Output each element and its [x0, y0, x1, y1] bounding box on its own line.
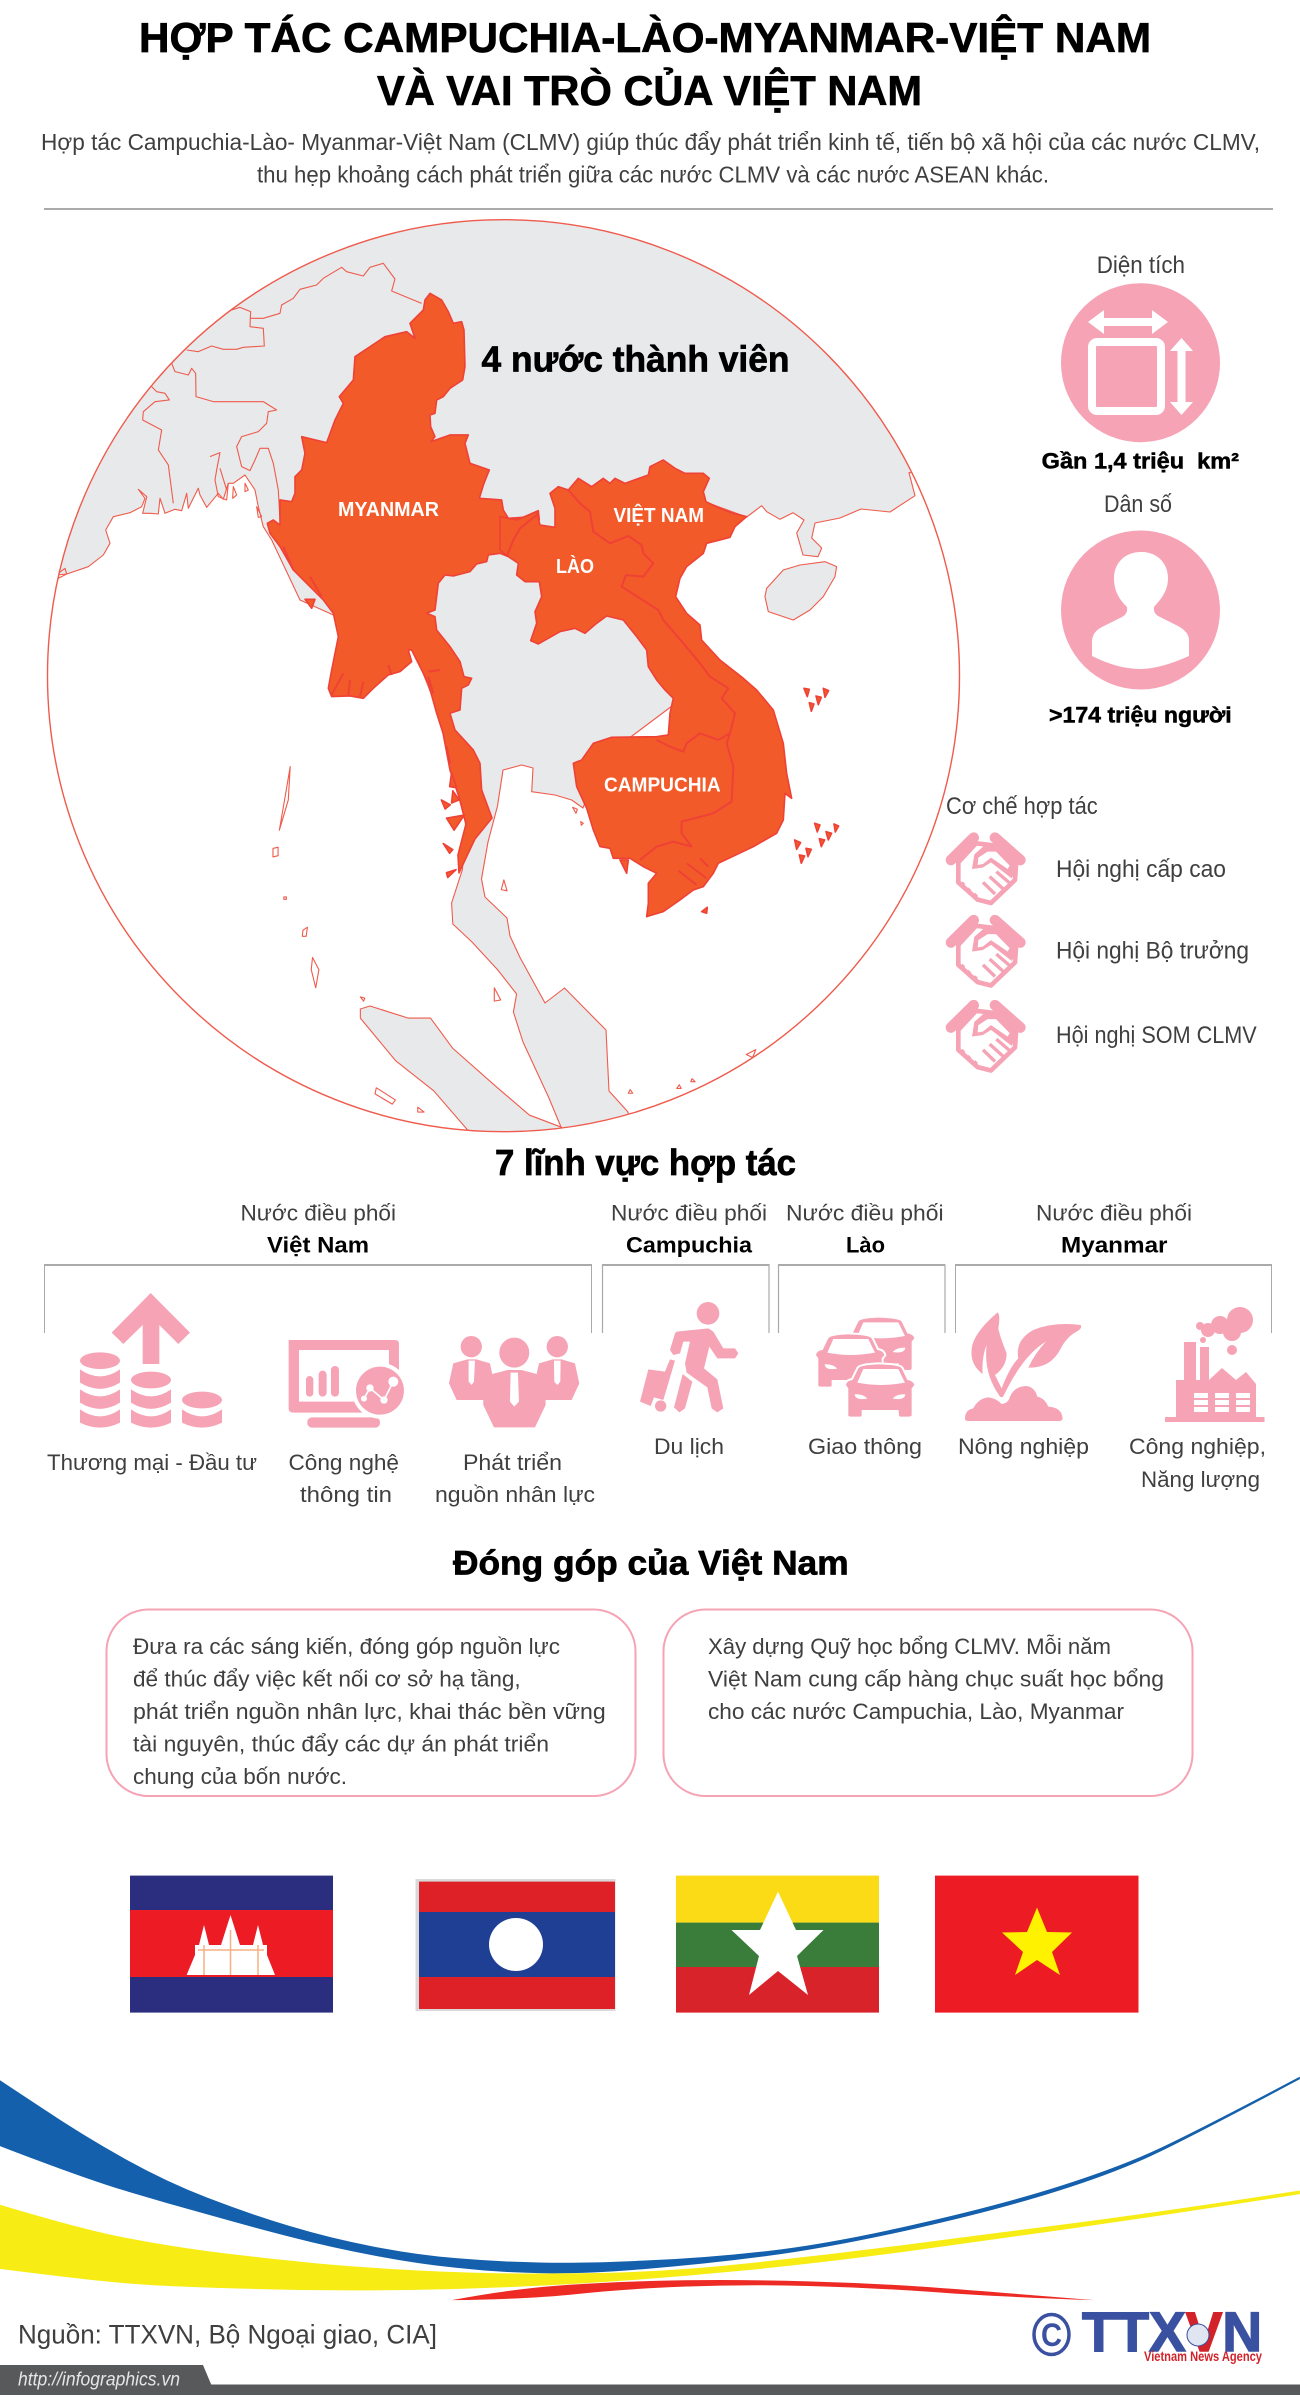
- sector: tourism: Du lịch: [654, 1434, 724, 1459]
- panel: contribution 1: tài nguyên, thúc đẩy các dự án phát triển: [133, 1732, 549, 1757]
- panel: contribution 2: Xây dựng Quỹ học bổng CLMV. Mỗi năm: [708, 1634, 1111, 1659]
- globe outline: [48, 220, 960, 1132]
- decorative swoosh band: [0, 2077, 1300, 2300]
- panel: area stat: Diện tích: [1097, 252, 1185, 279]
- item: SOM: Hội nghị SOM CLMV: [1056, 1022, 1257, 1049]
- panel: contribution 2: cho các nước Campuchia, Lào, Myanmar: [708, 1699, 1124, 1724]
- panel: population stat: Dân số: [1104, 491, 1172, 518]
- coordinator: Cambodia: Nước điều phối: [611, 1201, 767, 1226]
- icon: person: [1061, 530, 1220, 690]
- coordinator: Myanmar: Myanmar: [1061, 1233, 1168, 1258]
- intro text: [41, 129, 1260, 188]
- logo: TTXVN: TTXVN: [1082, 2300, 1262, 2363]
- panel: contribution 1: để thúc đẩy việc kết nối cơ sở hạ tầng,: [133, 1667, 521, 1692]
- coordinator: Vietnam: Nước điều phối: [240, 1201, 396, 1226]
- sector: transport: Giao thông: [808, 1434, 922, 1459]
- icon: coins and arrow: [80, 1293, 222, 1428]
- panel: contribution 2: Việt Nam cung cấp hàng chục suất học bổng: [708, 1667, 1164, 1692]
- sector: information technology: [288, 1340, 408, 1507]
- icon: cars: [816, 1318, 914, 1417]
- coordinator: Laos: Nước điều phối: [786, 1201, 944, 1226]
- coordinator: Vietnam: [44, 1201, 592, 1333]
- swoosh: blue: [0, 2077, 1300, 2273]
- title: HỢP TÁC CAMPUCHIA-LÀO-MYANMAR-VIỆT NAM: [139, 13, 1151, 61]
- flag: Cambodia: [130, 1876, 333, 2013]
- country: Vietnam, Laos, Cambodia: [500, 460, 839, 917]
- logo: TTXVN: C: [1041, 2317, 1062, 2353]
- coordinator: Vietnam: Việt Nam: [267, 1233, 369, 1258]
- panel: area stat: Gần 1,4 triệu km²: [1042, 449, 1239, 474]
- coordinator: Laos: Lào: [846, 1233, 885, 1258]
- sector: agriculture: Nông nghiệp: [958, 1434, 1089, 1459]
- sector: tourism: [640, 1302, 738, 1459]
- swoosh: red: [452, 2280, 1094, 2300]
- coordinator: Laos: [778, 1201, 945, 1333]
- sector: trade and investment: Thương mại - Đầu tư: [47, 1450, 257, 1475]
- panel: contribution 1: phát triển nguồn nhân lực, khai thác bền vững: [133, 1699, 606, 1724]
- panel: contribution 2: [664, 1610, 1192, 1796]
- sector: human resources: Phát triển: [463, 1450, 562, 1475]
- flag: Laos: [416, 1879, 616, 2011]
- sector: trade and investment: [47, 1293, 257, 1475]
- country: Myanmar: [267, 293, 539, 873]
- panel: population stat: >174 triệu người: [1049, 703, 1232, 728]
- icon: traveler: [640, 1302, 738, 1412]
- intro text: thu hẹp khoảng cách phát triển giữa các nước CLMV và các nước ASEAN khác.: [257, 162, 1049, 188]
- heading: 7 sectors: 7 lĩnh vực hợp tác: [495, 1142, 796, 1183]
- islands: Myeik archipelago: [441, 773, 464, 878]
- logo: TTXVN: Vietnam News Agency: [1144, 2348, 1262, 2364]
- flag: Myanmar: [676, 1876, 879, 2013]
- panel: contribution 1: chung của bốn nước.: [133, 1764, 347, 1789]
- panel: area stat: [1042, 252, 1239, 474]
- coordinator: Myanmar: Nước điều phối: [1036, 1201, 1192, 1226]
- item: SOM: [951, 1005, 1257, 1070]
- label: Myanmar: MYANMAR: [338, 499, 440, 521]
- icon: monitor with chart: [289, 1340, 408, 1428]
- swoosh: yellow: [0, 2191, 1300, 2290]
- sector: industry and energy: [1129, 1307, 1266, 1492]
- sector: industry and energy: Năng lượng: [1141, 1467, 1260, 1492]
- icon: factory: [1165, 1307, 1264, 1422]
- map: globe with member countries: [46, 219, 960, 1132]
- item: summit: Hội nghị cấp cao: [1056, 856, 1226, 883]
- land: west borders: [58, 263, 422, 578]
- label: Laos: LÀO: [556, 555, 594, 578]
- footer bar: http://infographics.vn: [18, 2370, 180, 2391]
- sector: industry and energy: Công nghiệp,: [1129, 1434, 1266, 1459]
- item: summit: [951, 838, 1226, 903]
- coordinator: Cambodia: Campuchia: [626, 1233, 753, 1258]
- panel: contribution 1: [106, 1610, 636, 1796]
- sector: information technology: thông tin: [300, 1482, 392, 1507]
- sector: information technology: Công nghệ: [288, 1450, 399, 1475]
- item: ministers: Hội nghị Bộ trưởng: [1056, 938, 1249, 964]
- land: Sumatra: [360, 1005, 562, 1131]
- coordinator: Cambodia: [602, 1201, 770, 1333]
- source: Nguồn: TTXVN, Bộ Ngoại giao, CIA]: [18, 2320, 437, 2350]
- panel: cooperation mechanisms: [946, 793, 1257, 1070]
- sector: human resources: [435, 1336, 595, 1507]
- icon: plant: [965, 1312, 1081, 1421]
- sector: transport: [808, 1318, 922, 1459]
- land: small islands: [273, 767, 756, 1112]
- icon: business people: [449, 1336, 579, 1427]
- label: Vietnam: VIỆT NAM: [614, 503, 704, 527]
- panel: contribution 1: Đưa ra các sáng kiến, đóng góp nguồn lực: [133, 1634, 560, 1659]
- title: VÀ VAI TRÒ CỦA VIỆT NAM: [377, 66, 922, 114]
- panel: cooperation mechanisms: Cơ chế hợp tác: [946, 793, 1098, 820]
- intro text: Hợp tác Campuchia-Lào- Myanmar-Việt Nam (CLMV) giúp thúc đẩy phát triển kinh tế, tiến bộ xã hội của các nước CLMV,: [41, 129, 1260, 155]
- label: Cambodia: CAMPUCHIA: [604, 774, 721, 796]
- land: mainland Asia and Malay peninsula: [59, 220, 916, 1128]
- coordinator: Myanmar: [955, 1201, 1272, 1333]
- sector: agriculture: [958, 1312, 1089, 1459]
- item: ministers: [951, 920, 1249, 985]
- footer bar: [0, 2365, 1300, 2395]
- flag: Vietnam: [935, 1876, 1138, 2013]
- sector: human resources: nguồn nhân lực: [435, 1482, 595, 1507]
- icon: area: [1061, 283, 1220, 442]
- title: [139, 13, 1151, 114]
- land: Hainan: [573, 562, 837, 825]
- map heading: 4 nước thành viên: [482, 338, 790, 380]
- heading: Vietnam contributions: Đóng góp của Việt Nam: [453, 1544, 849, 1582]
- panel: population stat: [1049, 491, 1232, 728]
